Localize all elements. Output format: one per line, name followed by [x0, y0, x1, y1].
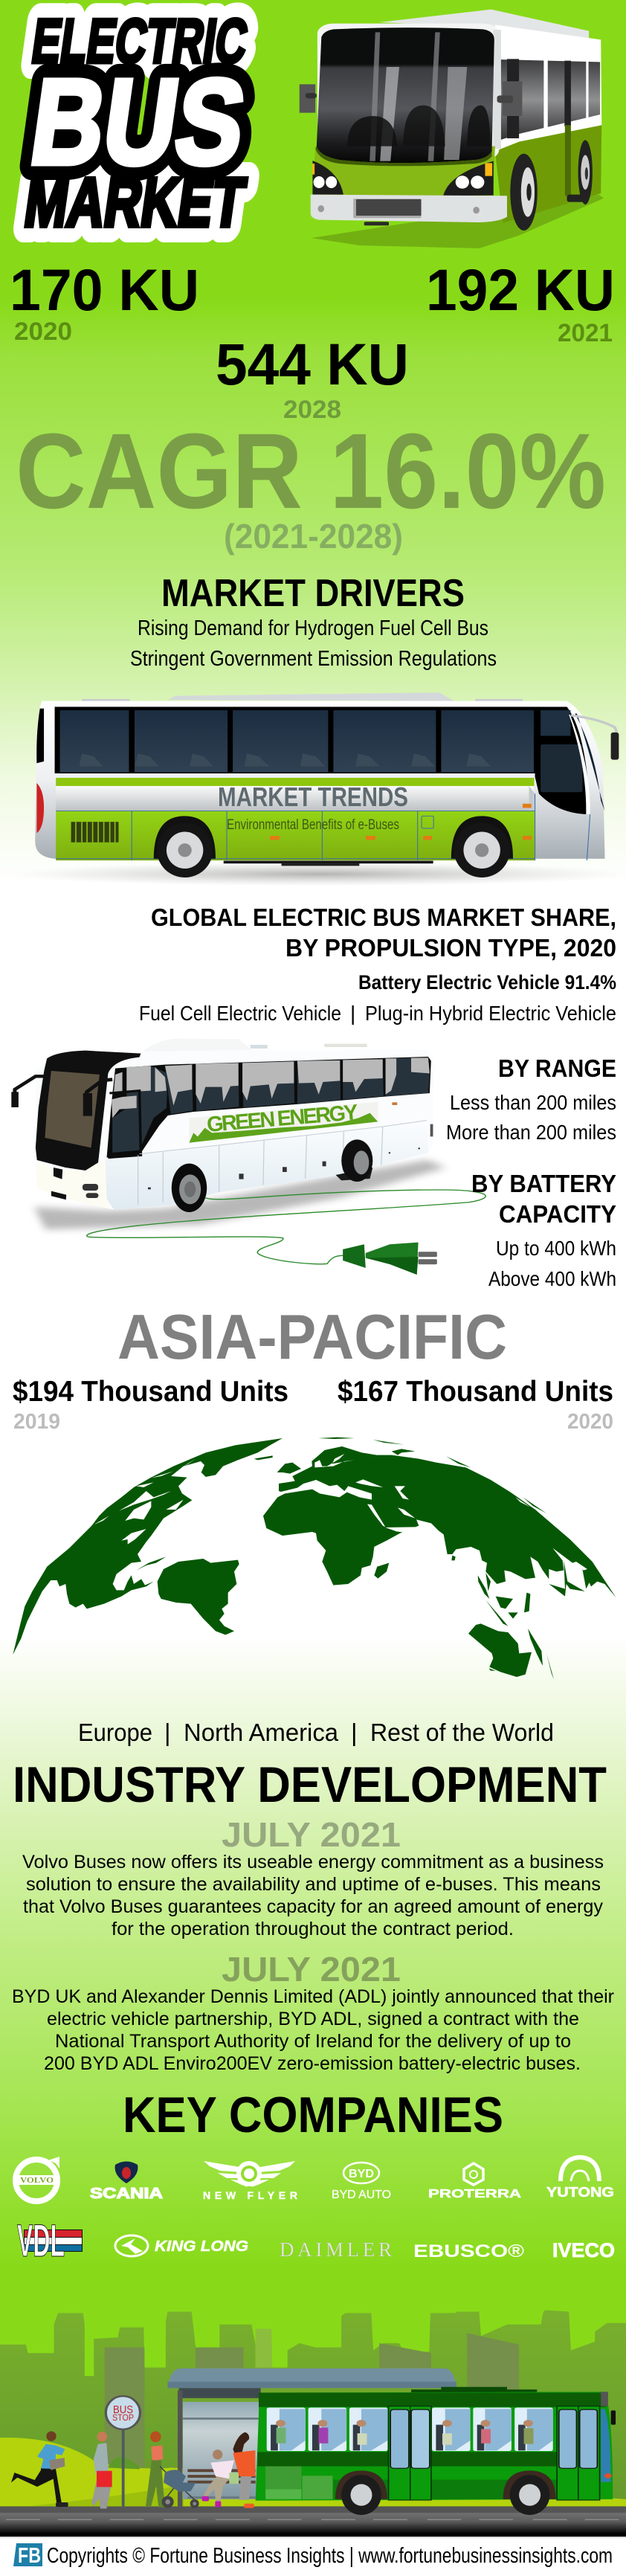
bus stop sign text: [112, 2403, 134, 2423]
stat: 170 KU 2020: 2020: [14, 318, 72, 346]
person: standing woman with orange bag: [233, 2432, 255, 2508]
person: seated woman on bench: [202, 2450, 239, 2507]
title word: BUS: BUS: [23, 54, 254, 190]
heading: global market share: [151, 904, 616, 962]
logo: yutong: [546, 2157, 614, 2200]
logo: byd auto: [332, 2163, 391, 2201]
stat: 544 KU 2028: [216, 331, 409, 424]
heading: market drivers: MARKET DRIVERS: [161, 572, 465, 615]
text: other regions: Rest of the World: [370, 1719, 554, 1746]
heading: global market share: BY PROPULSION TYPE, 2020: [285, 934, 616, 962]
bus stop sign pole: [106, 2396, 140, 2506]
stat: 194 thousand units 2019: $194 Thousand Units: [13, 1376, 288, 1408]
text block: byd adl: BYD UK and Alexander Dennis Limited (ADL) jointly announced that their: [12, 1986, 614, 2007]
illustration: front view green bus: [300, 10, 604, 248]
heading: asia-pacific: ASIA-PACIFIC: [117, 1302, 507, 1373]
footer logo: Fortune Business Insights: FB: [18, 2544, 41, 2568]
stat: 544 KU 2028: 2028: [283, 396, 341, 424]
logo: daimler: DAIMLER: [280, 2238, 392, 2261]
text: other propulsion types: [139, 1002, 616, 1025]
logo: volvo: [16, 2157, 59, 2201]
stat: 194 thousand units 2019: 2019: [13, 1410, 60, 1434]
panel: by battery capacity: [471, 1170, 616, 1290]
bus label: environmental benefits: Environmental Benefits of e-Buses: [227, 817, 399, 833]
title word: ELECTRIC: ELECTRIC: [28, 6, 252, 76]
panel: by battery capacity: BY BATTERY: [471, 1170, 616, 1197]
text: market drivers list: Rising Demand for Hydrogen Fuel Cell Bus: [138, 616, 488, 640]
logo: yutong: YUTONG: [546, 2185, 614, 2200]
logo: new flyer: NEW FLYER: [203, 2189, 297, 2201]
logo: byd auto: BYD: [349, 2168, 374, 2180]
logo: king long: [115, 2235, 248, 2256]
text: other regions: [78, 1719, 554, 1746]
logo: new flyer: [203, 2161, 297, 2201]
text block: volvo buses: that Volvo Buses guarantees capacity for an agreed amount of energy: [23, 1896, 604, 1917]
world map globe: [13, 1437, 616, 1679]
title word: MARKET: MARKET: [20, 163, 250, 241]
green city bus: [256, 2387, 616, 2515]
logo: king long: KING LONG: [155, 2238, 248, 2255]
title word: BUS: BUS: [23, 54, 254, 190]
bus stop sign text: STOP: [112, 2412, 134, 2423]
text block: byd adl: 200 BYD ADL Enviro200EV zero-emission battery-electric buses.: [44, 2053, 581, 2074]
logo: proterra: [428, 2163, 522, 2200]
logo: scania: [90, 2161, 163, 2202]
bus stop sign text: BUS: [113, 2403, 133, 2416]
logo: volvo: VOLVO: [20, 2177, 54, 2185]
text: other regions: Europe: [78, 1719, 152, 1746]
text block: volvo buses: Volvo Buses now offers its useable energy commitment as a business: [22, 1852, 604, 1873]
stat: 192 KU 2021: 192 KU: [426, 257, 615, 323]
stat: 192 KU 2021: 2021: [558, 319, 613, 347]
bus label: market trends: MARKET TRENDS: [218, 782, 408, 812]
text: market drivers list: Stringent Government Emission Regulations: [130, 647, 497, 671]
heading: key companies: KEY COMPANIES: [123, 2087, 503, 2143]
stat: 170 KU 2020: 170 KU: [10, 257, 199, 323]
bus shelter: [168, 2369, 456, 2506]
text block: volvo buses: for the operation throughout the contract period.: [112, 1919, 514, 1939]
illustration: white bus with charging cable and plug: [11, 1039, 485, 1275]
stat: 167 thousand units 2020: [338, 1376, 613, 1434]
panel: by battery capacity: CAPACITY: [499, 1200, 616, 1228]
logo: ebusco: EBUSCO®: [413, 2241, 524, 2261]
text: other regions: |: [164, 1719, 171, 1746]
illustration: side view bus with market trends: [12, 692, 626, 886]
title word: MARKET: MARKET: [20, 163, 250, 241]
logo: scania: SCANIA: [90, 2186, 163, 2202]
text block: byd adl: [12, 1986, 614, 2074]
logo: proterra: PROTERRA: [428, 2188, 522, 2200]
stat: 544 KU 2028: 544 KU: [216, 331, 409, 397]
person: woman with stroller: [146, 2431, 199, 2508]
illustration: city bus stop scene: [0, 2311, 626, 2537]
stat: 167 thousand units 2020: 2020: [567, 1410, 613, 1434]
logo: iveco: IVECO: [552, 2239, 615, 2261]
text block: byd adl: National Transport Authority of Ireland for the delivery of up to: [55, 2031, 571, 2052]
stat period: 2021-2028: (2021-2028): [224, 517, 403, 556]
text block: volvo buses: solution to ensure the availability and uptime of e-buses. This means: [26, 1874, 601, 1895]
stat: 167 thousand units 2020: $167 Thousand Units: [338, 1376, 613, 1408]
panel: by range: [446, 1054, 616, 1144]
title word: ELECTRIC: ELECTRIC: [28, 6, 252, 76]
panel: by range: BY RANGE: [498, 1054, 616, 1082]
text: other regions: North America: [184, 1719, 339, 1746]
stat: 194 thousand units 2019: [13, 1376, 288, 1434]
text: other propulsion types: Fuel Cell Electric Vehicle: [139, 1002, 341, 1025]
person: man with red bag: [91, 2432, 112, 2508]
bus banner text: green energy: GREEN ENERGY: [206, 1101, 359, 1137]
person: runner with briefcase: [11, 2431, 68, 2507]
text block: byd adl: electric vehicle partnership, BYD ADL, signed a contract with the: [47, 2009, 579, 2029]
text: other regions: |: [351, 1719, 358, 1746]
text block: volvo buses: [22, 1852, 604, 1939]
title sticker: Electric Bus Market: [20, 6, 254, 241]
text: other propulsion types: |: [350, 1002, 355, 1025]
date: july 2021 second: JULY 2021: [222, 1950, 401, 1989]
people waiting at the stop: [11, 2431, 255, 2508]
title word: ELECTRIC: [28, 6, 252, 76]
footer panel: [0, 2537, 626, 2576]
logo: vdl: VDL: [17, 2215, 65, 2266]
logo: byd auto: BYD AUTO: [332, 2189, 391, 2201]
date: july 2021 first: JULY 2021: [222, 1815, 401, 1854]
text: market drivers list: [130, 616, 497, 671]
